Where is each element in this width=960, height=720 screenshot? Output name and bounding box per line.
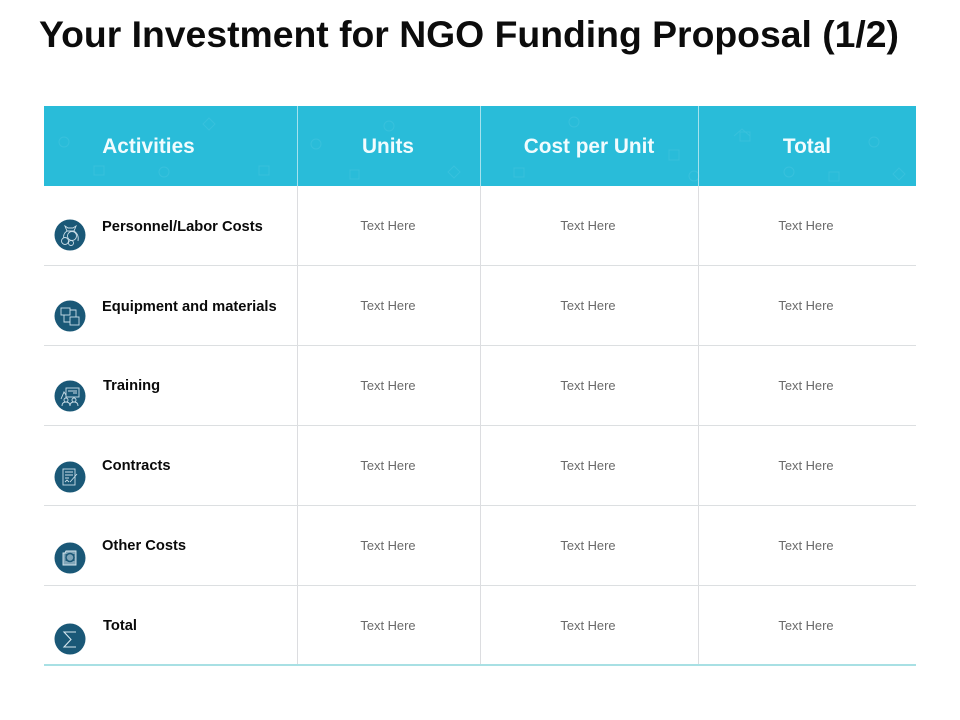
header: Activities: Activities [102,135,195,158]
row 1 values [360,218,834,233]
row 3 values: Text Here [778,378,834,393]
row 6 values [360,618,834,633]
row 5 values: Text Here [778,538,834,553]
row 4 values: Text Here [778,458,834,473]
row 3 values [360,378,834,393]
row 5 icon: banknote [54,542,86,574]
row 1 values: Text Here [560,218,616,233]
row 1 values: Text Here [360,218,416,233]
row 1 icon: money bag [54,220,86,250]
row 5 values [360,538,834,553]
row 5 values: Text Here [560,538,616,553]
header: Total: Total [783,135,831,158]
row 4 values: Text Here [560,458,616,473]
row 5 label: Other Costs [102,538,186,554]
header: Units: Units [362,135,414,158]
row 4 values: Text Here [360,458,416,473]
row 2 label: Equipment and materials [102,299,277,315]
row 6 values: Text Here [778,618,834,633]
row 6 icon: sigma [54,624,86,654]
row 2 icon: flow diagram [54,300,86,332]
row 3 label: Training [103,378,160,394]
row 4 icon: contract [54,462,86,492]
row 2 values: Text Here [560,298,616,313]
row 2 values [360,298,834,313]
title: Your Investment for NGO Funding Proposal (1/2) [39,13,899,55]
row 4 values [360,458,834,473]
row 3 icon: training [54,380,86,412]
header dividers [297,106,298,186]
row 6 values: Text Here [360,618,416,633]
row 6 label: Total [103,618,137,634]
row 3 values: Text Here [360,378,416,393]
row 2 values: Text Here [360,298,416,313]
row 2 values: Text Here [778,298,834,313]
row 1 values: Text Here [778,218,834,233]
row 4 label: Contracts [102,458,171,474]
table header band [44,106,916,186]
row 6 values: Text Here [560,618,616,633]
table bottom rule [44,664,916,666]
row 1 label: Personnel/Labor Costs [102,219,263,235]
row 5 values: Text Here [360,538,416,553]
row 3 values: Text Here [560,378,616,393]
header: Cost per Unit: Cost per Unit [524,135,654,158]
